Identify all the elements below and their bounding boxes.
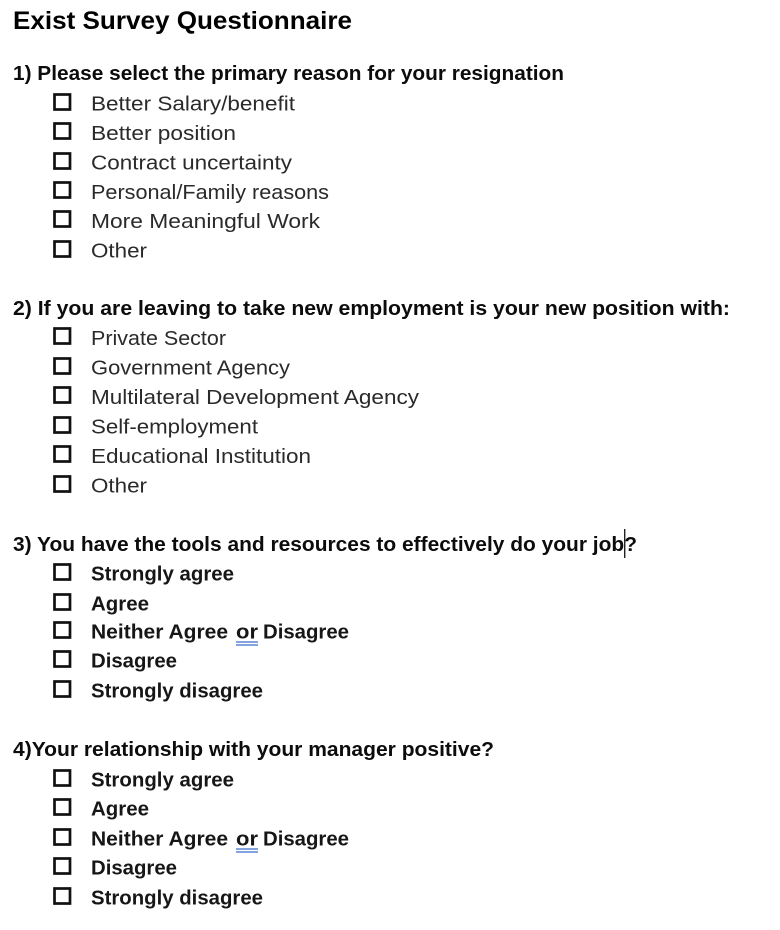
option: Other: Other — [91, 240, 147, 262]
option: Strongly disagree: Strongly disagree — [91, 886, 263, 910]
option: Strongly agree: Strongly agree — [91, 562, 234, 586]
option: Personal/Family reasons: Personal/Family reasons — [91, 181, 329, 204]
option: Agree — [54, 592, 149, 616]
option: Strongly agree: Strongly agree — [91, 768, 234, 792]
question 4 heading: 4)Your relationship with your manager positive? — [13, 738, 494, 761]
option: Better Salary/benefit: Better Salary/benefit — [91, 92, 295, 116]
question 3 heading: 3) You have the tools and resources to effectively do your job? — [13, 533, 637, 556]
option: Other: Other — [91, 474, 147, 498]
option: Private Sector: Private Sector — [91, 327, 226, 350]
option: Disagree — [54, 650, 177, 672]
option: Multilateral Development Agency: Multilateral Development Agency — [91, 386, 420, 409]
option: Contract uncertainty: Contract uncertainty — [91, 152, 293, 174]
panel: question 3 — [13, 529, 637, 702]
option: Neither Agree or Disagree: or — [236, 828, 258, 850]
option: Neither Agree or Disagree — [54, 828, 349, 852]
option: Agree: Agree — [91, 798, 149, 820]
option: Strongly disagree: Strongly disagree — [91, 680, 263, 702]
option: Neither Agree or Disagree: Disagree — [263, 828, 349, 850]
option: Neither Agree or Disagree: Disagree — [263, 620, 349, 644]
option: Neither Agree or Disagree — [54, 620, 349, 645]
option: Neither Agree or Disagree: Neither Agree — [91, 828, 228, 850]
option: Educational Institution: Educational Institution — [91, 445, 311, 468]
option: Other — [54, 474, 147, 498]
option: Self-employment: Self-employment — [91, 416, 258, 438]
question 1 heading: 1) Please select the primary reason for your resignation — [13, 62, 564, 85]
option: Other — [54, 240, 147, 262]
option: Disagree: Disagree — [91, 650, 177, 672]
question 2 heading: 2) If you are leaving to take new employment is your new position with: — [13, 297, 730, 320]
panel: question 4 — [13, 738, 494, 910]
panel: question 1 — [13, 62, 564, 262]
option: Better position: Better position — [91, 122, 236, 145]
option: Disagree — [54, 856, 177, 880]
option: Agree — [54, 798, 149, 820]
panel: question 2 — [13, 297, 730, 498]
text cursor — [624, 529, 625, 558]
option: Agree: Agree — [91, 592, 149, 616]
option: Neither Agree or Disagree: or — [236, 620, 258, 644]
title: Exist Survey Questionnaire — [13, 7, 352, 35]
option: Disagree: Disagree — [91, 856, 177, 880]
option: Government Agency: Government Agency — [91, 356, 291, 380]
option: Neither Agree or Disagree: Neither Agree — [91, 620, 228, 644]
option: More Meaningful Work: More Meaningful Work — [91, 210, 321, 233]
